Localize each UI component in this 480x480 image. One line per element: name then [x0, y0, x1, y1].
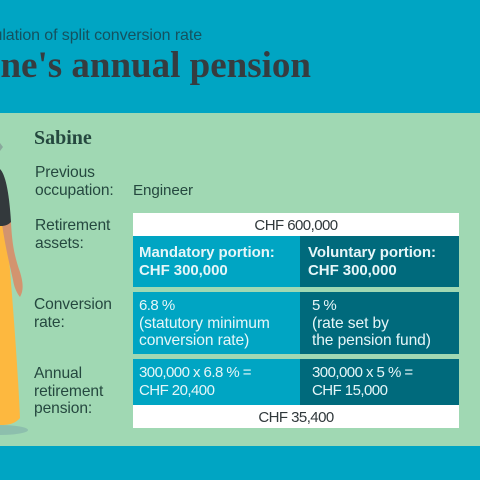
mandatory conversion rate [133, 292, 300, 354]
label: conversion rate [34, 296, 112, 330]
label: annual retirement pension: pension: [34, 400, 92, 417]
mandatory conversion rate: 6.8 % [139, 297, 175, 314]
mandatory conversion rate: (statutory minimum [139, 314, 270, 332]
voluntary pension calculation: CHF 15,000 [312, 382, 387, 398]
total pension: CHF 35,400 [258, 409, 334, 426]
mandatory portion: CHF 300,000 [139, 262, 228, 278]
label: retirement assets: assets: [35, 234, 84, 252]
label: annual retirement pension: Annual [34, 365, 82, 382]
voluntary portion: Voluntary portion: [308, 244, 436, 261]
name heading: Sabine [34, 127, 92, 149]
voluntary conversion rate: 5 % [312, 297, 336, 314]
total pension [133, 405, 459, 428]
label: previous occupation: occupation: [35, 182, 114, 198]
voluntary conversion rate [300, 292, 459, 354]
voluntary pension calculation: 300,000 x 5 % = [312, 364, 413, 381]
mandatory conversion rate: conversion rate) [139, 332, 249, 349]
total assets [133, 213, 459, 236]
label: retirement assets: Retirement [35, 217, 110, 234]
value: engineer: Engineer [133, 182, 193, 199]
label: previous occupation [35, 164, 114, 198]
voluntary conversion rate: the pension fund) [312, 332, 431, 349]
label: conversion rate: Conversion [34, 296, 112, 313]
mandatory portion: Mandatory portion: [139, 244, 275, 261]
label: previous occupation: Previous [35, 164, 95, 181]
voluntary portion [300, 236, 459, 287]
voluntary portion: CHF 300,000 [308, 262, 397, 278]
label: conversion rate: rate: [34, 314, 65, 330]
mandatory pension calculation: 300,000 x 6.8 % = [139, 364, 251, 381]
label: annual retirement pension [34, 365, 104, 417]
label: retirement assets [35, 217, 110, 252]
illustration: woman standing [0, 143, 28, 435]
voluntary pension calculation [300, 359, 459, 405]
mandatory pension calculation: CHF 20,400 [139, 382, 214, 398]
total assets: CHF 600,000 [254, 217, 338, 234]
mandatory portion [133, 236, 300, 287]
mandatory pension calculation [133, 359, 300, 405]
voluntary conversion rate: (rate set by [312, 314, 389, 332]
label: annual retirement pension: retirement [34, 382, 103, 400]
panel: Sabine's pension calculation [0, 113, 480, 446]
